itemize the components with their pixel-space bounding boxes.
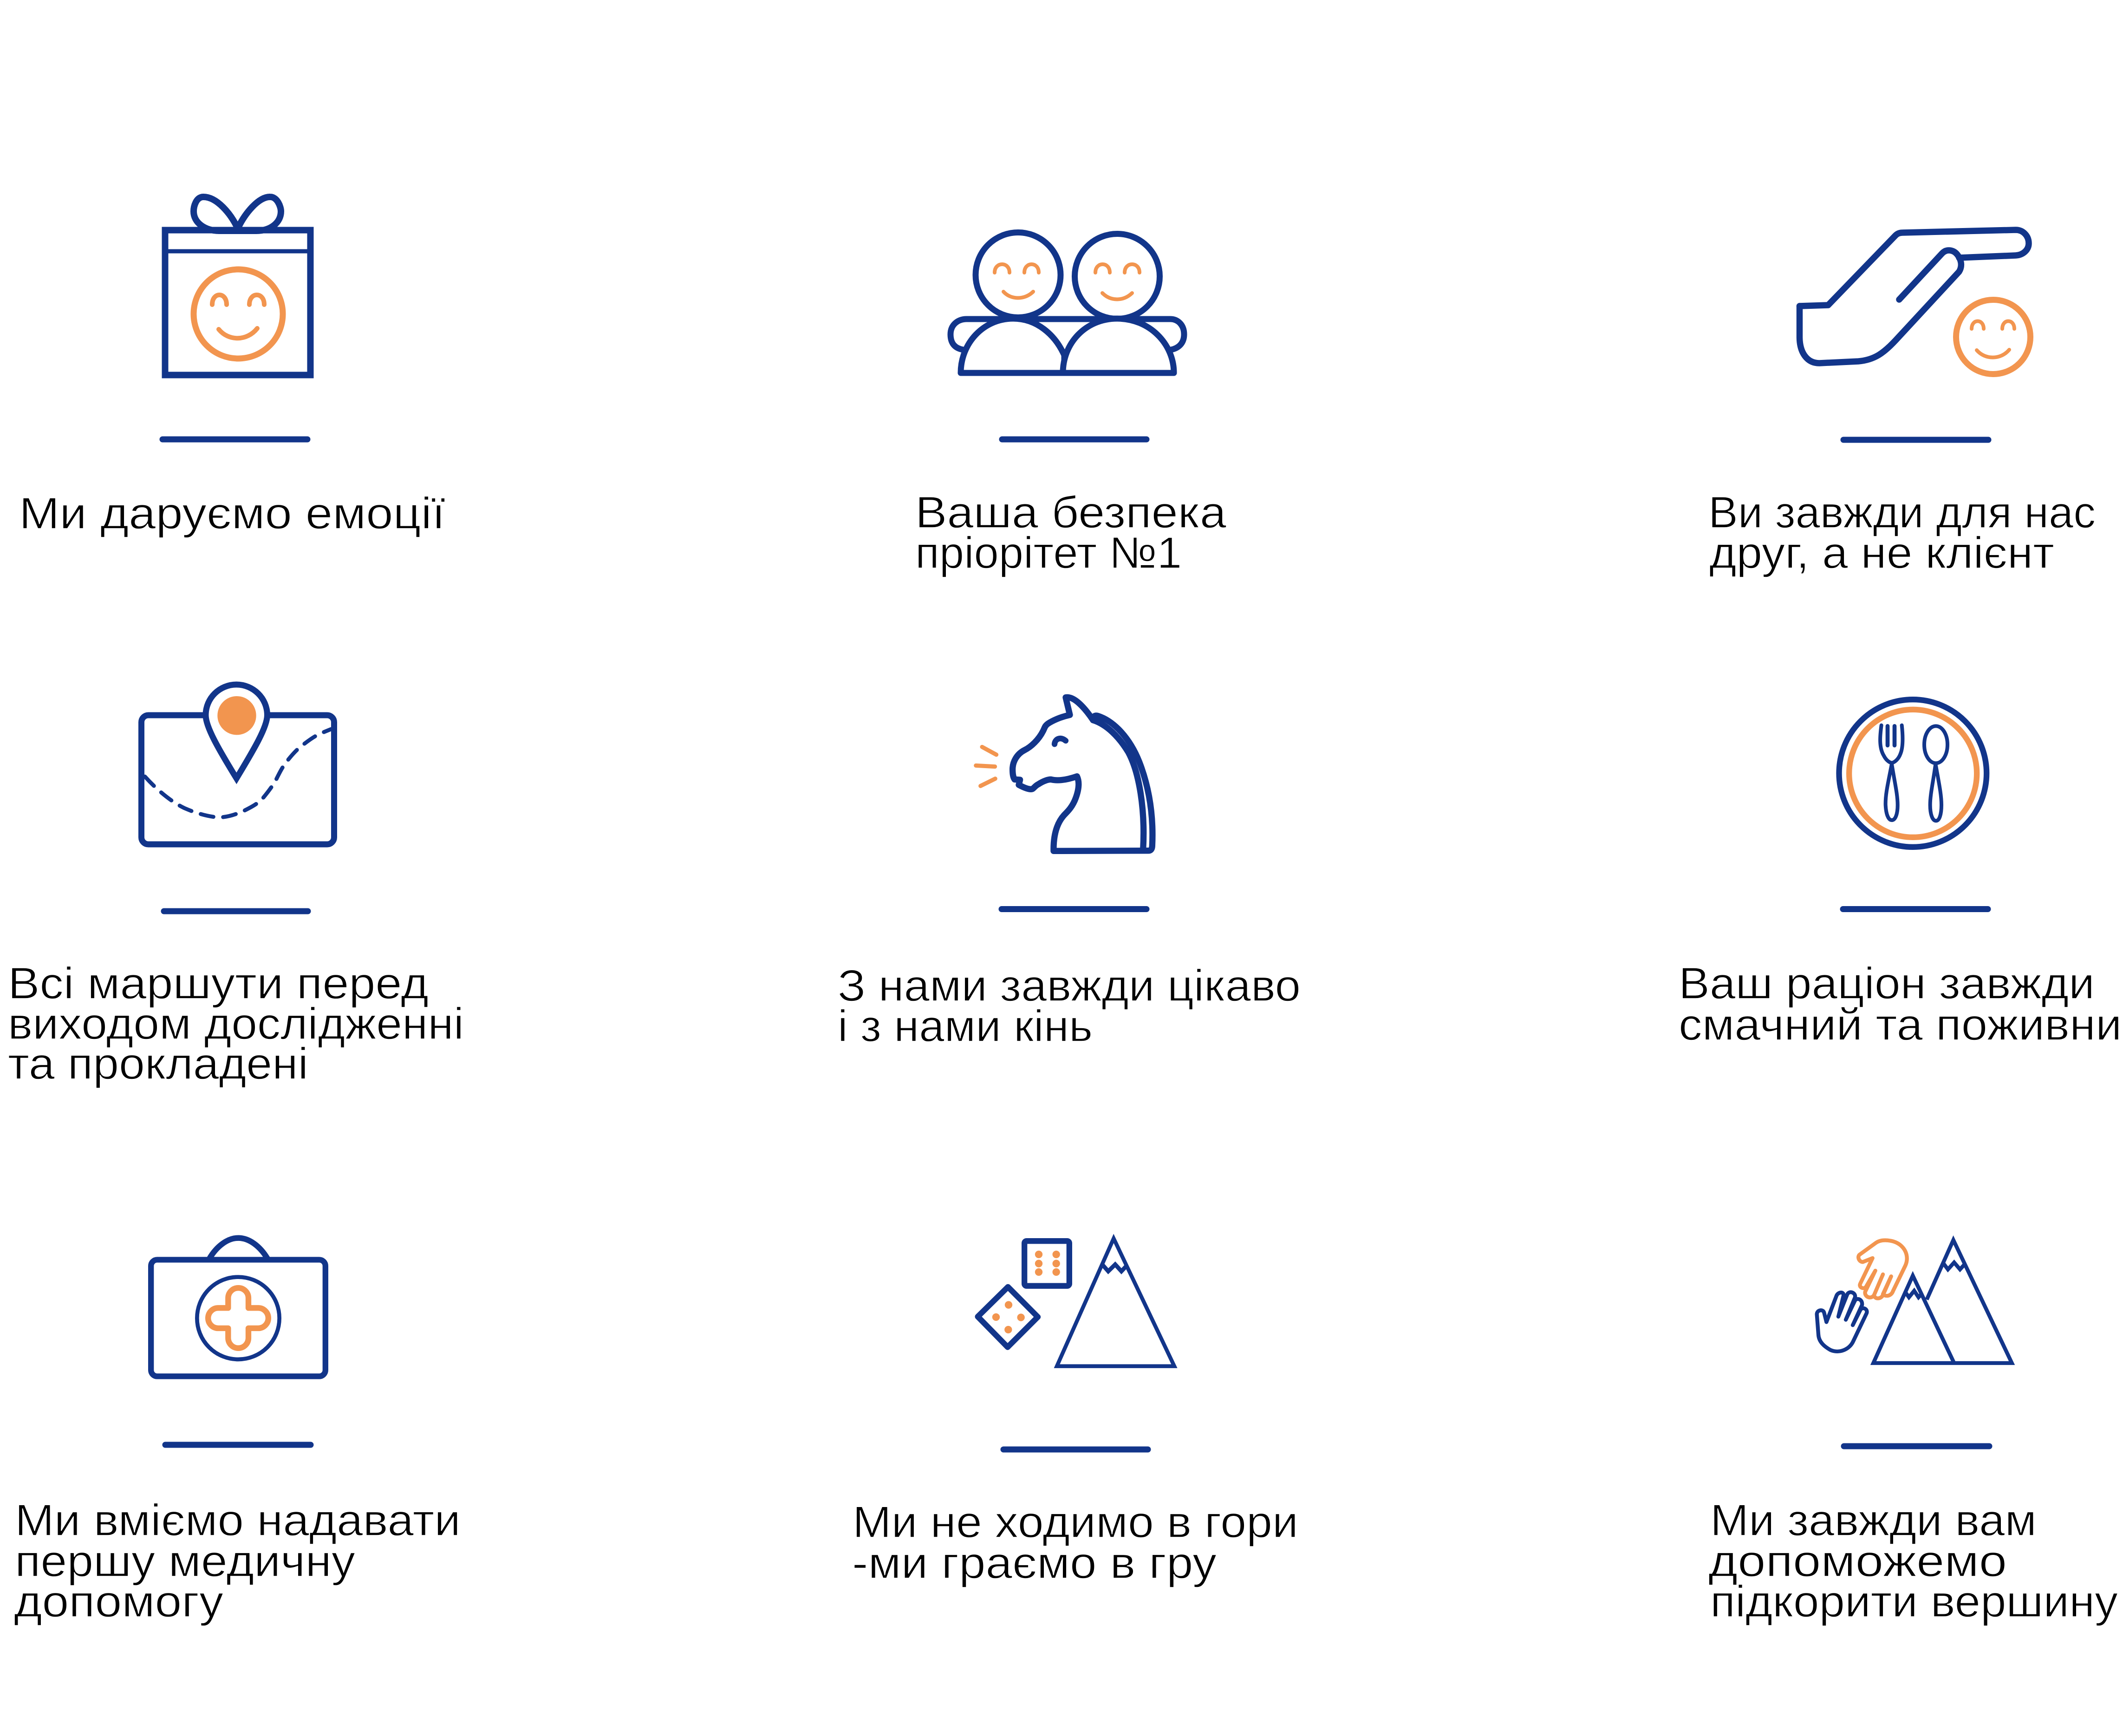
text: routes	[8, 959, 464, 1089]
icon: first aid kit	[151, 1238, 326, 1376]
text: safety: Ваша безпека	[915, 488, 1227, 537]
panel: routes	[8, 685, 464, 1089]
divider line	[1002, 906, 1146, 912]
panel: first aid	[14, 1238, 461, 1626]
text: first aid: допомогу	[14, 1577, 223, 1626]
icon: helping hands and mountains	[1817, 1240, 2012, 1363]
text: safety: пріорітет №1	[915, 528, 1182, 578]
text: friend: друг, а не клієнт	[1709, 528, 2054, 578]
text: friend	[1708, 488, 2096, 578]
divider line	[1002, 437, 1146, 442]
text: summit	[1708, 1495, 2118, 1626]
panel: summit	[1708, 1240, 2118, 1626]
text: routes: та прокладені	[8, 1039, 308, 1089]
text: first aid: Ми вміємо надавати	[15, 1495, 461, 1545]
text: games	[852, 1497, 1298, 1588]
panel: games	[852, 1239, 1298, 1588]
text: routes: Всі маршути перед	[8, 959, 429, 1008]
panel: friend	[1708, 230, 2096, 578]
panel: interesting	[838, 697, 1301, 1051]
icon: map with location pin	[141, 685, 334, 844]
icon: gift box with smile	[165, 197, 311, 375]
divider line	[165, 1442, 311, 1448]
divider line	[1003, 1446, 1148, 1453]
text: summit: допоможемо	[1708, 1536, 2007, 1586]
text: emotions: Ми даруємо емоції	[19, 489, 445, 538]
text: diet: Ваш раціон завжди	[1679, 959, 2095, 1008]
panel: safety	[915, 232, 1227, 578]
text: interesting: і з нами кінь	[838, 1001, 1093, 1051]
panel: emotions	[19, 197, 445, 538]
text: first aid	[14, 1495, 461, 1626]
icon: plate with fork and spoon	[1839, 699, 1986, 847]
divider line	[164, 908, 308, 914]
text: safety	[915, 488, 1227, 578]
text: friend: Ви завжди для нас	[1708, 488, 2096, 537]
text: summit: Ми завжди вам	[1710, 1495, 2037, 1545]
divider line	[1843, 437, 1988, 443]
text: games: -ми граємо в гру	[852, 1538, 1217, 1588]
text: routes: виходом дослідженні	[8, 999, 464, 1049]
text: summit: підкорити вершину	[1710, 1577, 2118, 1626]
panel: diet	[1679, 699, 2123, 1050]
icon: dice and mountain	[978, 1239, 1174, 1366]
text: games: Ми не ходимо в гори	[853, 1497, 1298, 1547]
text: interesting	[838, 961, 1301, 1051]
divider line	[163, 437, 307, 442]
icon: two smiling people	[951, 232, 1184, 373]
text: interesting: З нами завжди цікаво	[838, 961, 1301, 1011]
text: diet: смачний та поживний	[1679, 1000, 2123, 1050]
divider line	[1843, 906, 1988, 912]
divider line	[1844, 1443, 1989, 1449]
text: diet	[1679, 959, 2123, 1050]
text: first aid: першу медичну	[15, 1536, 355, 1586]
icon: chess knight horse	[976, 697, 1153, 851]
icon: protecting hand with smile	[1800, 230, 2030, 374]
